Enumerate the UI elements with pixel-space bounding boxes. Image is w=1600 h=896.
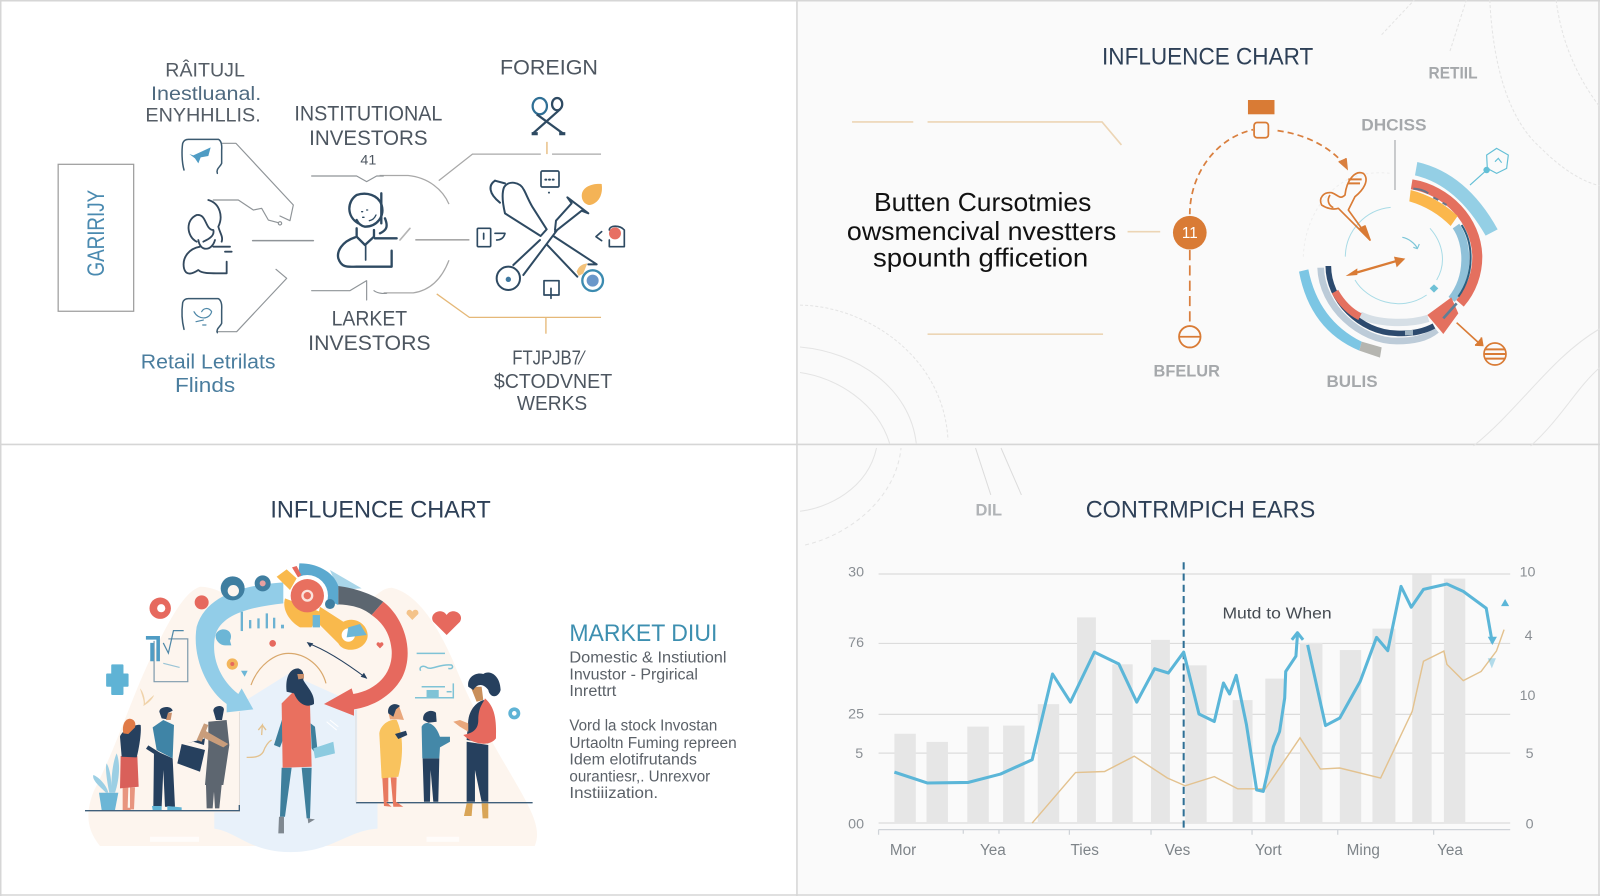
icon: orange pin	[1321, 173, 1370, 240]
icon: minus circle	[1179, 326, 1201, 347]
box: vertical label: GARIRIJY	[83, 190, 110, 277]
label: top left group: Inestluanal.	[151, 83, 261, 105]
icon: mini bars	[241, 612, 284, 631]
title: INFLUENCE CHART	[1102, 43, 1313, 70]
text block: detail: Vord la stock Invostan	[569, 718, 717, 735]
title: CONTRMPICH EARS	[1086, 496, 1315, 523]
dashed marker	[1183, 562, 1185, 829]
icon: leaf	[140, 688, 154, 706]
illustration	[85, 563, 537, 852]
icon: bag	[177, 738, 205, 772]
text block	[847, 189, 1116, 272]
axis: right labels: 10	[1520, 688, 1536, 704]
labels: gray: RETIIL	[1429, 65, 1478, 83]
arrow: to stripes icon	[1457, 323, 1506, 365]
gridlines	[879, 574, 1510, 835]
person: gray apron	[197, 706, 229, 808]
axis: x labels: Ves	[1165, 842, 1191, 859]
icon: top orange tag	[1248, 100, 1274, 138]
people	[93, 673, 520, 833]
heading: market investors: LARKET	[332, 307, 407, 331]
text block: detail: Idem elotifrutands	[569, 751, 697, 768]
text block: detail: Urtaoltn Fuming repreen	[569, 735, 737, 752]
label: retail funds	[141, 351, 276, 397]
axis: left labels: 30	[848, 565, 864, 581]
axis: right labels: 0	[1526, 817, 1534, 833]
icons: badges and people	[182, 139, 410, 333]
axis: left labels: 76	[848, 635, 864, 651]
line: tan series	[1032, 630, 1504, 823]
bars	[894, 575, 1465, 823]
axis: x labels: Ties	[1071, 842, 1099, 859]
title: INFLUENCE CHART	[270, 496, 491, 523]
floors	[85, 710, 533, 811]
icon: foreign scissors	[532, 98, 565, 134]
connector lines: orange	[437, 142, 601, 334]
panel: contribution chart	[800, 448, 1536, 859]
icon: bottom badge	[182, 299, 222, 333]
label: bottom right group: FTJPJB7⁄	[512, 347, 587, 369]
label: dil: DIL	[976, 501, 1002, 519]
axis: x labels: Mor	[890, 842, 916, 859]
icon: hexagon	[1470, 148, 1508, 185]
radial chart	[1299, 140, 1498, 358]
label: bottom right group	[494, 347, 612, 415]
person: center woman	[274, 692, 338, 833]
axis: x labels: Yea	[1437, 842, 1463, 859]
background contour lines	[800, 0, 1600, 446]
panel: market illustration	[85, 496, 737, 852]
icon: check dot	[508, 707, 520, 719]
heading: institutional investors: INSTITUTIONAL	[294, 101, 442, 125]
icon: plus	[107, 665, 128, 694]
line: blue series	[894, 584, 1492, 791]
background contour lines	[800, 448, 1021, 545]
connectors: left	[213, 143, 410, 332]
markers	[1488, 599, 1509, 668]
icons: right side lines	[415, 653, 453, 698]
circular arrows and gear	[196, 563, 408, 716]
icon: plant	[93, 753, 119, 810]
icons: floating dots	[195, 575, 276, 677]
axis: right labels: 5	[1526, 746, 1534, 762]
icon: person center	[338, 193, 397, 267]
person: yellow coat	[379, 704, 407, 807]
text block: spounth gfficetion	[873, 244, 1088, 272]
box: vertical label	[58, 164, 134, 311]
heading: market investors	[308, 307, 431, 355]
heading: foreign: FOREIGN	[500, 55, 598, 79]
person: blue shirt	[146, 707, 182, 810]
text block: summary	[569, 649, 727, 700]
hair: center woman	[286, 668, 314, 706]
text block: detail	[569, 718, 737, 802]
icon: arrow squiggle	[247, 725, 272, 757]
label: bottom right group: WERKS	[517, 393, 587, 415]
text block: Butten Cursotmies	[874, 189, 1091, 217]
text block: summary: Inrettrt	[569, 683, 617, 700]
axis: x labels: Yort	[1255, 842, 1282, 859]
labels: gray	[1154, 65, 1478, 391]
connector lines: right side	[380, 141, 735, 293]
person: right standing	[453, 673, 501, 818]
labels: gray: DHCISS	[1361, 117, 1427, 135]
axis: right labels: 10	[1520, 565, 1536, 581]
icons: left circle	[149, 598, 171, 619]
heading: institutional investors: INVESTORS	[309, 126, 428, 150]
heading: institutional investors	[294, 101, 442, 168]
axis: left labels	[848, 565, 864, 833]
axis: right labels	[1520, 565, 1536, 833]
tan lines	[852, 122, 1160, 334]
icon: person left	[184, 200, 232, 274]
icon: checklist	[146, 631, 188, 682]
node: orange circle: 11	[1182, 225, 1198, 242]
text block: summary: Domestic & Instiutionl	[569, 649, 727, 666]
icon: hearts	[377, 610, 461, 648]
arc and double arrow	[251, 642, 367, 685]
panel: influence chart circular	[800, 0, 1600, 446]
text block: detail: ourantiesr,. Unrexvor	[569, 769, 710, 786]
icon: crossed tools	[477, 171, 624, 298]
heading: institutional investors: 41	[360, 152, 376, 168]
annotation: Mutd to When	[1222, 605, 1332, 622]
dashed timeline	[1190, 130, 1347, 321]
heading: market: MARKET DIUI	[569, 620, 717, 647]
axis: left labels: 5	[855, 746, 863, 762]
axis: x labels: Yea	[980, 842, 1006, 859]
person: blue jacket	[422, 711, 450, 802]
label: top left group: RÂITUJL	[165, 59, 245, 82]
text block: summary: Invustor - Prgirical	[569, 667, 698, 684]
icon: top badge	[182, 139, 222, 173]
labels: gray: BULIS	[1327, 373, 1378, 391]
axis: x labels: Ming	[1347, 842, 1380, 859]
person: red skirt	[120, 719, 141, 810]
panel: investor network	[58, 55, 735, 415]
heading: market investors: INVESTORS	[308, 331, 431, 355]
label: retail funds: Retail Letrilats	[141, 351, 276, 373]
label: top left group	[145, 59, 261, 126]
label: bottom right group: $CTODVNET	[494, 371, 612, 393]
axis: left labels: 00	[848, 817, 864, 833]
axis: x labels	[890, 842, 1463, 859]
label: top left group: ENYHHLLIS.	[145, 104, 261, 126]
text block: owsmencival nvestters	[847, 218, 1116, 246]
text block: detail: Instiiization.	[569, 785, 658, 802]
label: retail funds: Flinds	[175, 375, 235, 397]
labels: gray: BFELUR	[1154, 363, 1220, 381]
node: orange circle	[1173, 216, 1207, 250]
axis: right labels: 4	[1525, 628, 1533, 644]
axis: left labels: 25	[848, 706, 864, 722]
backdrop	[88, 587, 537, 852]
